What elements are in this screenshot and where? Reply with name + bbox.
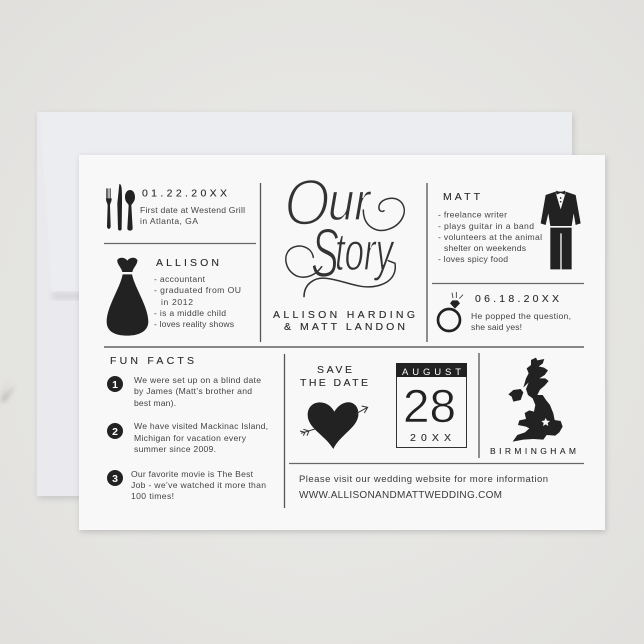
- date: first date: in Atlanta, GA: [140, 216, 198, 226]
- couple names: ALLISON HARDING: [273, 309, 415, 321]
- envelope: [37, 112, 574, 499]
- Matt profile: - freelance writer: [438, 210, 507, 220]
- fact 2: summer since 2009.: [134, 444, 216, 454]
- heading: FUN FACTS: [110, 355, 194, 367]
- icon: heart with arrow: [300, 402, 368, 449]
- Allison profile: in 2012: [161, 297, 193, 307]
- icon: tuxedo: [541, 191, 581, 269]
- fact 3: 3: [112, 473, 118, 485]
- date: first date: First date at Westend Grill: [140, 205, 245, 215]
- Allison profile: [154, 257, 241, 329]
- calendar: [396, 363, 467, 448]
- title: Our Story: [284, 165, 404, 297]
- divider lines: [104, 183, 584, 508]
- fact 1: We were set up on a blind date: [134, 375, 261, 385]
- fact 2: We have visited Mackinac Island,: [134, 421, 268, 431]
- website note: WWW.ALLISONANDMATTWEDDING.COM: [299, 490, 502, 501]
- Allison profile: ALLISON: [156, 257, 219, 269]
- couple names: & MATT LANDON: [284, 321, 405, 333]
- fact 3: Job - we’ve watched it more than: [131, 480, 266, 490]
- fact 2: 2: [112, 426, 118, 438]
- panel: fun facts: [107, 355, 268, 501]
- Matt profile: shelter on weekends: [444, 243, 526, 253]
- date: proposal: she said yes!: [471, 322, 522, 332]
- Allison profile: - is a middle child: [154, 308, 226, 318]
- calendar: 20XX: [410, 432, 451, 444]
- Matt profile: - plays guitar in a band: [438, 221, 534, 231]
- Allison profile: - loves reality shows: [154, 319, 234, 329]
- date: first date: 01.22.20XX: [142, 188, 227, 200]
- fact 2: Michigan for vacation every: [134, 433, 247, 443]
- title: Our Story: ur: [328, 172, 372, 232]
- couple names: [273, 309, 415, 333]
- save the date heading: SAVE: [317, 364, 352, 376]
- Matt profile: - loves spicy food: [438, 254, 508, 264]
- fact 3: 100 times!: [131, 491, 174, 501]
- fact 1: by James (Matt’s brother and: [134, 386, 252, 396]
- flourishes: [286, 198, 404, 297]
- title: Our Story: tory: [335, 222, 395, 282]
- map: United Kingdom: [490, 358, 576, 456]
- save the date heading: [300, 364, 368, 389]
- date: proposal: 06.18.20XX: [475, 293, 559, 305]
- icon: dress: [107, 258, 148, 336]
- date: first date: [140, 188, 245, 226]
- save the date heading: THE DATE: [300, 377, 368, 389]
- date: proposal: He popped the question,: [471, 311, 571, 321]
- Matt profile: - volunteers at the animal: [438, 232, 542, 242]
- fact 1: best man).: [134, 398, 176, 408]
- Matt profile: MATT: [443, 191, 481, 203]
- fact 1: [107, 375, 261, 408]
- icon: ring: [438, 292, 463, 331]
- website note: [299, 474, 548, 501]
- icon: cutlery: [106, 184, 135, 231]
- fact 1: 1: [112, 379, 118, 391]
- title: Our Story: O: [284, 165, 330, 239]
- calendar: AUGUST: [402, 367, 461, 378]
- fact 3: Our favorite movie is The Best: [131, 469, 254, 479]
- website note: Please visit our wedding website for more information: [299, 474, 548, 485]
- Allison profile: - graduated from OU: [154, 285, 241, 295]
- Allison profile: - accountant: [154, 274, 206, 284]
- Matt profile: [438, 191, 542, 264]
- map: United Kingdom: BIRMINGHAM: [490, 446, 576, 456]
- date: proposal: [471, 293, 571, 332]
- title: Our Story: S: [311, 214, 339, 292]
- fact 2: [107, 421, 268, 454]
- card: [79, 155, 606, 532]
- calendar: 28: [403, 380, 456, 432]
- fact 3: [107, 469, 266, 501]
